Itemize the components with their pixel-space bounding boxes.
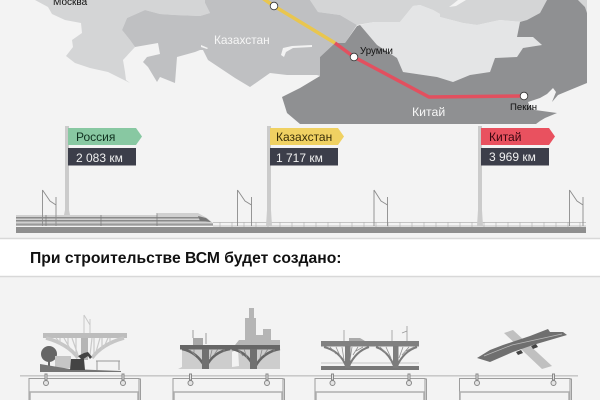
railing	[213, 222, 586, 227]
country name: Россия	[76, 130, 115, 144]
hook	[188, 374, 193, 386]
distance: 2 083 км	[76, 151, 123, 165]
distance plate	[68, 148, 136, 166]
distance plate	[270, 148, 338, 166]
hook	[44, 374, 48, 386]
hook	[264, 374, 270, 386]
track bed	[16, 227, 586, 233]
flag	[68, 128, 142, 145]
city marker: Beijing	[520, 92, 528, 100]
city marker: Moscow route point	[270, 2, 278, 10]
hook	[406, 374, 412, 386]
country name: Китай	[489, 130, 521, 144]
region: China	[282, 0, 587, 124]
sign: Russia	[64, 126, 142, 215]
region: Mongolia	[360, 5, 542, 82]
region: Russia	[35, 0, 587, 83]
hook	[330, 374, 335, 386]
illustration: arch bridge	[321, 326, 419, 370]
arches and deck	[180, 345, 280, 350]
sign: Kazakhstan	[266, 126, 344, 226]
distance: 1 717 км	[276, 151, 323, 165]
hook	[120, 374, 126, 386]
flag	[481, 128, 555, 145]
label: Beijing: Пекин	[510, 102, 537, 113]
map: route Moscow to Beijing	[35, 0, 587, 124]
label: Urumqi: Урумчи	[360, 46, 393, 57]
distance: 3 969 км	[489, 150, 536, 164]
pole	[266, 126, 272, 226]
label: China: Китай	[412, 105, 445, 119]
board 3	[315, 374, 426, 400]
pole	[477, 126, 483, 226]
lake: Balkhash	[281, 45, 312, 57]
sign: China	[477, 126, 555, 226]
illustration: road overpass	[477, 329, 567, 369]
distance plate	[481, 148, 549, 166]
city marker: Urumqi	[350, 53, 358, 61]
illustration: bridge under construction	[40, 315, 127, 372]
pole	[64, 126, 70, 215]
route: China section	[335, 43, 524, 97]
route: Russia and Kazakhstan section	[252, 0, 335, 43]
ground	[40, 364, 121, 372]
board 2	[173, 374, 284, 400]
lake: Aral	[201, 45, 208, 49]
excavator	[70, 352, 92, 370]
catenary poles	[42, 190, 583, 226]
board 4	[460, 374, 572, 400]
flag	[270, 128, 344, 145]
country name: Казахстан	[276, 130, 332, 144]
heading band	[0, 238, 600, 276]
region: Kazakhstan	[122, 0, 357, 87]
label: Kazakhstan: Казахстан	[214, 33, 270, 47]
hook	[551, 374, 556, 386]
railway track with train	[16, 190, 586, 233]
illustration: city bridge	[178, 308, 280, 369]
lake: Baikal	[449, 0, 466, 7]
board 1	[29, 374, 140, 400]
shelf line	[20, 375, 578, 377]
hook	[474, 374, 480, 386]
train	[16, 213, 213, 226]
heading: При строительстве ВСМ будет создано:	[30, 250, 342, 267]
tree	[41, 346, 57, 362]
